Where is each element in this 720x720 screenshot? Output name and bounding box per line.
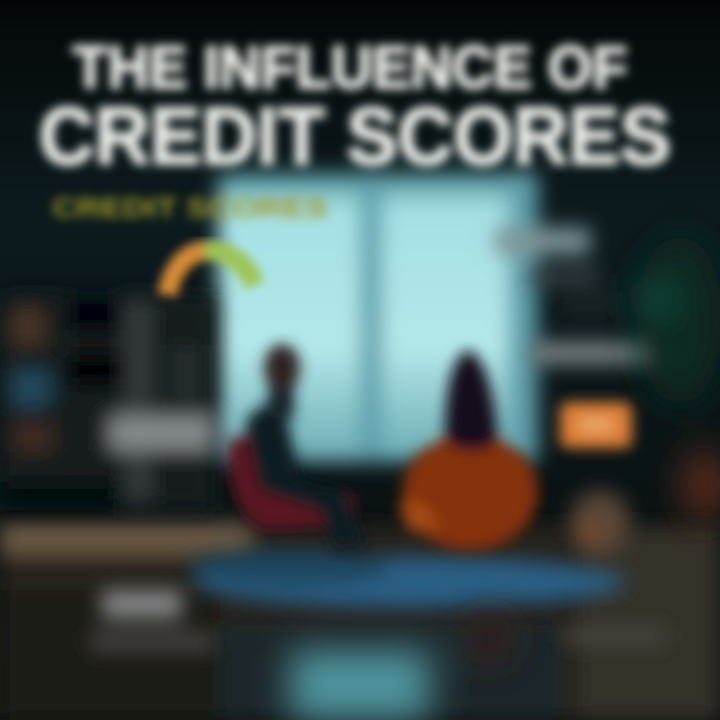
floor label xyxy=(90,590,665,652)
bottom reflection xyxy=(290,614,516,720)
window xyxy=(218,172,538,462)
title xyxy=(39,34,671,182)
rug xyxy=(190,550,625,608)
gauge arc icon xyxy=(167,250,255,295)
person left on red chair xyxy=(228,344,365,550)
title: CREDIT SCORES xyxy=(39,91,671,182)
orange badge xyxy=(560,402,632,448)
right side labels xyxy=(495,228,660,364)
yellow subtitle: CREDIT SCORES xyxy=(52,192,328,223)
floor xyxy=(0,522,720,720)
person right on orange chair xyxy=(398,350,538,550)
plant xyxy=(636,235,720,521)
left shelves xyxy=(0,295,215,510)
title: THE INFLUENCE OF xyxy=(72,34,628,101)
round stool xyxy=(570,490,630,554)
